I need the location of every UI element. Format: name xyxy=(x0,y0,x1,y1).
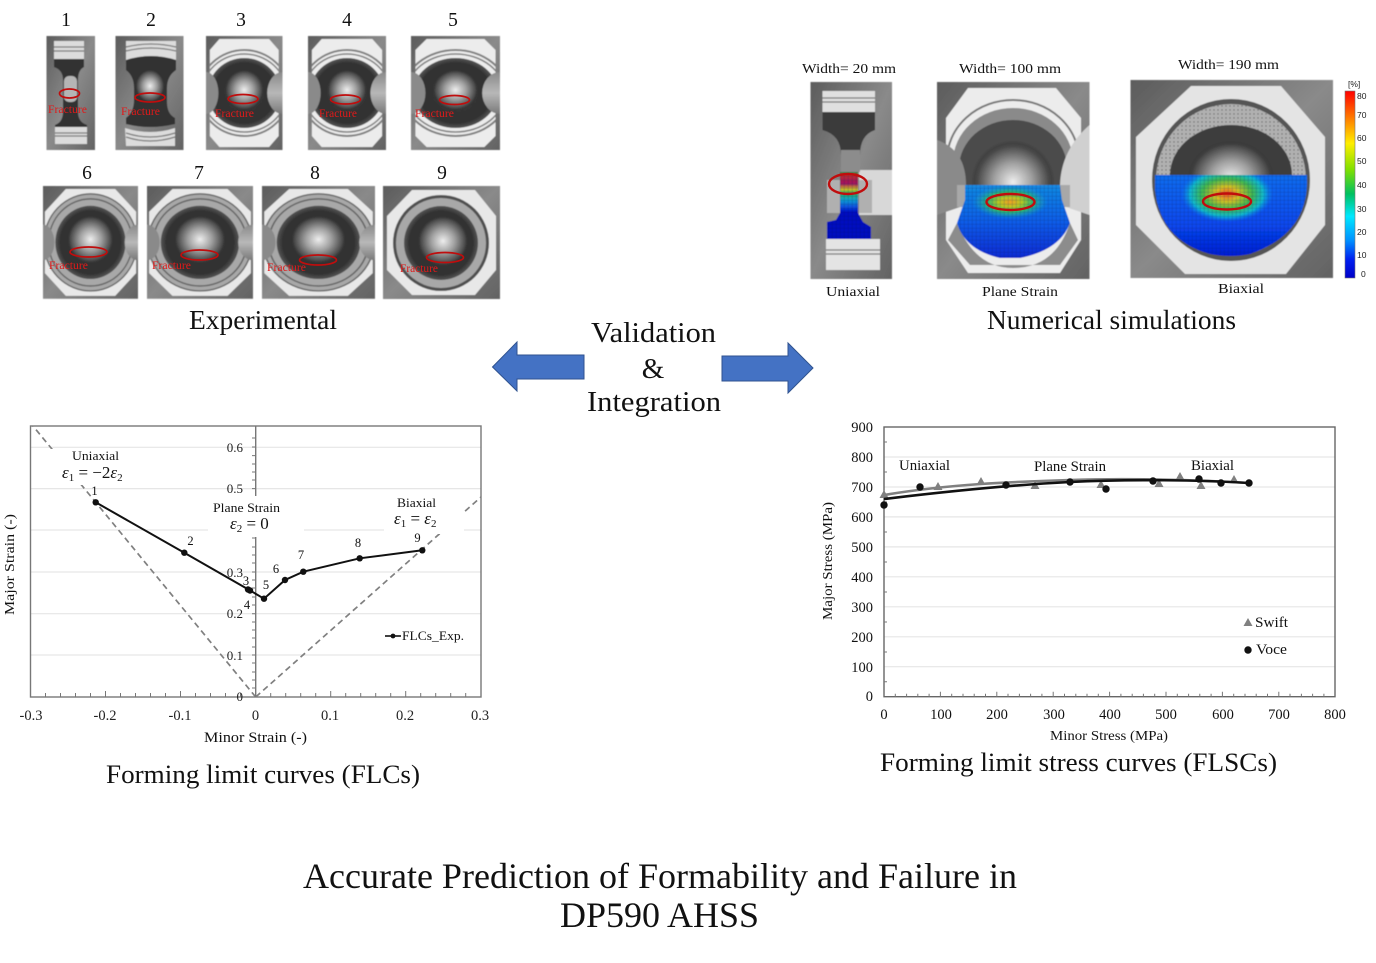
colour scale legend: 0 xyxy=(1361,269,1366,279)
annotation: biaxial: 2 xyxy=(431,518,436,530)
arrow: left xyxy=(492,342,584,391)
specimen 8 xyxy=(248,163,391,299)
specimen 1: Fracture xyxy=(48,104,87,116)
annotation: biaxial xyxy=(394,495,436,530)
center text: Validation and Integration: Integration xyxy=(587,386,722,418)
y axis tick labels: 0.3 xyxy=(227,565,243,580)
x axis tick labels xyxy=(880,707,1346,723)
chart: forming limit curves xyxy=(3,426,489,746)
x axis tick labels: 200 xyxy=(986,707,1008,723)
point numbers: 4 xyxy=(244,598,251,612)
Voce curve xyxy=(884,480,1249,499)
center text: Validation and Integration: Validation xyxy=(591,317,717,349)
specimen 7 xyxy=(134,163,268,299)
FLC experimental line xyxy=(92,499,425,602)
point numbers: 7 xyxy=(298,548,304,562)
y axis tick labels: 0.5 xyxy=(227,481,243,496)
x axis tick labels: 700 xyxy=(1268,707,1290,723)
y axis tick labels: 900 xyxy=(851,420,873,436)
annotation: uniaxial: ε xyxy=(110,463,117,482)
y axis tick labels: 100 xyxy=(851,660,873,676)
y axis tick labels: 200 xyxy=(851,630,873,646)
specimen 7: Fracture xyxy=(152,260,191,272)
x axis tick labels: 500 xyxy=(1155,707,1177,723)
legend: Voce xyxy=(1256,642,1287,658)
title: Accurate Prediction of Formability and Failure in xyxy=(303,856,1017,896)
x axis tick labels: 600 xyxy=(1212,707,1234,723)
annotation: plane strain: Plane Strain xyxy=(1034,459,1107,475)
y axis title: Major Stress (MPa) xyxy=(820,502,835,620)
specimen 6 xyxy=(32,163,151,299)
simulation: uniaxial: Uniaxial xyxy=(826,285,880,300)
simulation: plane strain: Width= 100 mm xyxy=(959,62,1061,77)
x axis tick labels: 0.3 xyxy=(471,708,489,724)
annotation: uniaxial: ε xyxy=(62,463,69,482)
specimen 3 xyxy=(194,10,298,150)
y axis tick labels: 600 xyxy=(851,510,873,526)
annotation: biaxial: Biaxial xyxy=(1191,458,1234,474)
title xyxy=(303,856,1017,935)
specimen 9: 9 xyxy=(437,163,447,184)
colour scale legend: [%] xyxy=(1348,79,1360,89)
colour scale legend: 40 xyxy=(1357,180,1367,190)
point numbers: 1 xyxy=(91,484,98,498)
point numbers xyxy=(91,484,421,612)
label: plane strain patch xyxy=(208,496,304,537)
y axis tick labels: 0.6 xyxy=(227,440,244,455)
x axis tick labels: 0.2 xyxy=(396,708,414,724)
annotation: biaxial: ε xyxy=(424,509,431,528)
y axis tick labels xyxy=(227,440,244,704)
specimen 3: 3 xyxy=(236,10,246,31)
colour scale legend: 70 xyxy=(1357,110,1367,120)
simulation: uniaxial xyxy=(802,62,896,300)
annotation: uniaxial xyxy=(62,448,123,484)
annotation: plane strain: 2 xyxy=(237,523,242,535)
x axis tick labels: -0.2 xyxy=(94,708,116,724)
specimen 5: Fracture xyxy=(415,108,454,120)
label: biaxial patch xyxy=(384,492,464,534)
Swift markers xyxy=(880,472,1238,498)
colour scale legend: 60 xyxy=(1357,133,1367,143)
x axis title: Minor Stress (MPa) xyxy=(1050,728,1168,743)
point numbers: 8 xyxy=(355,536,361,550)
specimen 4 xyxy=(295,10,402,150)
simulation: plane strain xyxy=(937,62,1090,300)
simulation: plane strain: Plane Strain xyxy=(982,285,1058,300)
y axis tick labels: 500 xyxy=(851,540,873,556)
y axis tick labels: 800 xyxy=(851,450,873,466)
label: uniaxial patch xyxy=(48,449,144,485)
specimen 5: 5 xyxy=(448,10,458,31)
annotation: plane strain: Plane Strain xyxy=(213,500,281,515)
point numbers: 3 xyxy=(243,574,249,588)
annotation: biaxial: 1 xyxy=(401,518,406,530)
heading: Numerical simulations: Numerical simulations xyxy=(987,304,1236,335)
annotation: biaxial: Biaxial xyxy=(397,495,436,510)
Voce markers xyxy=(880,475,1253,509)
specimen 8: Fracture xyxy=(267,262,306,274)
y axis tick labels: 300 xyxy=(851,600,873,616)
colour scale legend: 50 xyxy=(1357,156,1367,166)
annotation: biaxial: ε xyxy=(394,509,401,528)
y axis tick labels xyxy=(851,420,873,705)
y axis tick labels: 400 xyxy=(851,570,873,586)
simulation: biaxial: Biaxial xyxy=(1218,282,1264,297)
specimen 2: Fracture xyxy=(121,106,160,118)
annotation: uniaxial: 1 xyxy=(69,472,74,484)
x axis tick labels: 0.1 xyxy=(321,708,339,724)
chart: forming limit stress curves xyxy=(820,420,1346,743)
panel: experimental specimens xyxy=(32,10,518,299)
specimen 5 xyxy=(397,10,518,150)
x axis tick labels: 0 xyxy=(880,707,888,723)
annotation: uniaxial: 2 xyxy=(117,472,123,484)
colour scale legend: 10 xyxy=(1357,250,1367,260)
center text: Validation and Integration: & xyxy=(642,353,665,385)
point numbers: 5 xyxy=(263,578,269,592)
legend: FLCs_Exp: FLCs_Exp. xyxy=(402,629,464,643)
specimen 2: 2 xyxy=(146,10,156,31)
annotation: plane strain: ε xyxy=(230,514,237,533)
colour scale legend: 30 xyxy=(1357,204,1367,214)
specimen 4: Fracture xyxy=(319,108,357,120)
x axis title: Minor Strain (-) xyxy=(204,730,307,746)
specimen 1: 1 xyxy=(61,10,71,31)
title: DP590 AHSS xyxy=(560,895,759,935)
annotation: plane strain: = 0 xyxy=(242,514,269,533)
specimen 9: Fracture xyxy=(400,263,438,275)
y axis tick labels: 0 xyxy=(866,689,873,705)
specimen 3: Fracture xyxy=(215,108,254,120)
colour scale legend: 80 xyxy=(1357,91,1367,101)
specimen 6: Fracture xyxy=(49,260,88,272)
Swift curve xyxy=(884,479,1249,495)
annotation: biaxial: = xyxy=(406,509,424,528)
x axis tick labels: 0 xyxy=(252,708,259,724)
x axis tick labels: 800 xyxy=(1324,707,1346,723)
specimen 2 xyxy=(116,10,184,150)
x axis tick labels: -0.3 xyxy=(20,708,42,724)
y axis tick labels: 700 xyxy=(851,480,873,496)
legend: Swift xyxy=(1255,615,1288,631)
simulation: biaxial xyxy=(1130,58,1333,297)
annotation: plane strain xyxy=(213,500,281,535)
y axis tick labels: 0.2 xyxy=(227,606,243,621)
annotation: uniaxial: Uniaxial xyxy=(899,458,950,474)
annotation: uniaxial: = −2 xyxy=(74,463,110,482)
specimen 6: 6 xyxy=(82,163,92,184)
heading: Forming limit curves: Forming limit curves (FLCs) xyxy=(106,760,420,789)
point numbers: 2 xyxy=(187,534,194,548)
specimen 4: 4 xyxy=(342,10,352,31)
colour scale legend: 20 xyxy=(1357,227,1367,237)
point numbers: 6 xyxy=(273,562,279,576)
x axis tick labels: 400 xyxy=(1099,707,1121,723)
x axis tick labels: -0.1 xyxy=(169,708,191,724)
specimen 9 xyxy=(383,163,500,299)
panel: numerical simulations xyxy=(802,58,1367,300)
y axis tick labels: 0 xyxy=(236,689,243,704)
colour scale legend xyxy=(1345,79,1367,279)
specimen 8: 8 xyxy=(310,163,320,184)
x axis tick labels: 300 xyxy=(1043,707,1065,723)
annotation: uniaxial: Uniaxial xyxy=(72,448,119,463)
x axis tick labels xyxy=(20,708,489,724)
point numbers: 9 xyxy=(414,531,421,545)
specimen 7: 7 xyxy=(194,163,204,184)
x axis tick labels: 100 xyxy=(930,707,952,723)
specimen 1 xyxy=(46,10,95,150)
y axis title: Major Strain (-) xyxy=(3,514,18,615)
y axis tick labels: 0.1 xyxy=(227,648,243,663)
simulation: uniaxial: Width= 20 mm xyxy=(802,62,896,77)
heading: Experimental: Experimental xyxy=(189,304,337,335)
simulation: biaxial: Width= 190 mm xyxy=(1178,58,1279,73)
center text: Validation and Integration xyxy=(587,317,722,418)
heading: Forming limit stress curves: Forming limit stress curves (FLSCs) xyxy=(880,748,1277,777)
arrow: right xyxy=(722,343,813,393)
legend xyxy=(1244,615,1288,658)
